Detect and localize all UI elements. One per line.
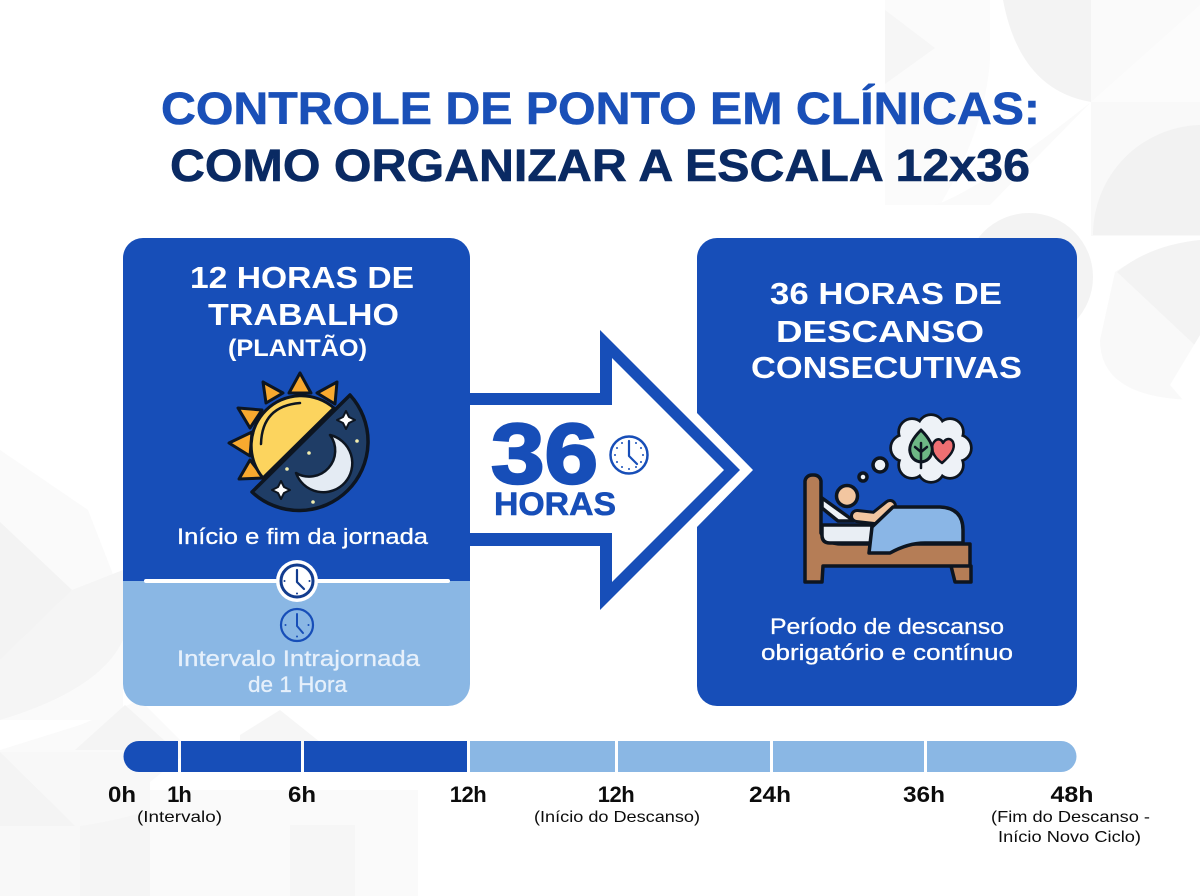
heading: 36 horas de descanso consecutivas: DESCANSO [776, 314, 984, 349]
heading: 12 horas de trabalho: (PLANTÃO) [228, 334, 367, 362]
timeline bar [124, 741, 1076, 772]
title [161, 83, 1040, 191]
title: COMO ORGANIZAR A ESCALA 12x36 [170, 140, 1030, 191]
heading: 12 horas de trabalho: 12 HORAS DE [190, 260, 414, 295]
timeline labels: 24h [749, 782, 791, 807]
timeline labels [108, 782, 1150, 846]
timeline labels: 36h [903, 782, 945, 807]
panel: 36 horas de descanso [697, 238, 1077, 706]
timeline labels: 12h [598, 782, 634, 807]
timeline labels: Início Novo Ciclo) [998, 829, 1141, 846]
heading: 36 horas de descanso consecutivas: CONSECUTIVAS [751, 350, 1022, 385]
timeline labels: 48h [1050, 782, 1094, 807]
text: horas: HORAS [494, 486, 616, 522]
timeline labels: 0h [108, 782, 136, 807]
text: período de descanso: obrigatório e contínuo [761, 640, 1013, 665]
heading: 12 horas de trabalho [190, 260, 414, 362]
text: intervalo intrajornada: Intervalo Intrajornada [177, 646, 421, 671]
heading: 36 horas de descanso consecutivas: 36 HORAS DE [770, 276, 1002, 311]
timeline labels: (Início do Descanso) [534, 809, 700, 826]
heading: 36 horas de descanso consecutivas [751, 276, 1022, 385]
timeline labels: 12h [450, 782, 486, 807]
text: 36: 36 [491, 407, 598, 502]
timeline labels: (Intervalo) [137, 809, 222, 826]
icon: sun and moon [229, 373, 368, 511]
text: intervalo intrajornada [177, 646, 421, 697]
panel: 12 horas de trabalho [123, 238, 470, 706]
text: início e fim da jornada: Início e fim da jornada [177, 524, 429, 549]
text: período de descanso: Período de descanso [770, 614, 1004, 639]
title: CONTROLE DE PONTO EM CLÍNICAS: [161, 83, 1040, 134]
icon: person resting in bed [805, 415, 971, 582]
text: intervalo intrajornada: de 1 Hora [248, 672, 347, 697]
timeline labels: 6h [288, 782, 316, 807]
text: período de descanso [761, 614, 1013, 665]
panel: intervalo section [123, 581, 470, 706]
icon: interval clock [281, 609, 313, 641]
heading: 12 horas de trabalho: TRABALHO [208, 297, 399, 332]
icon: clock [610, 436, 648, 474]
timeline labels: 1h [167, 782, 191, 807]
timeline labels: (Fim do Descanso - [991, 809, 1150, 826]
divider line with clock [144, 560, 450, 602]
arrow: 36 horas [470, 330, 753, 610]
